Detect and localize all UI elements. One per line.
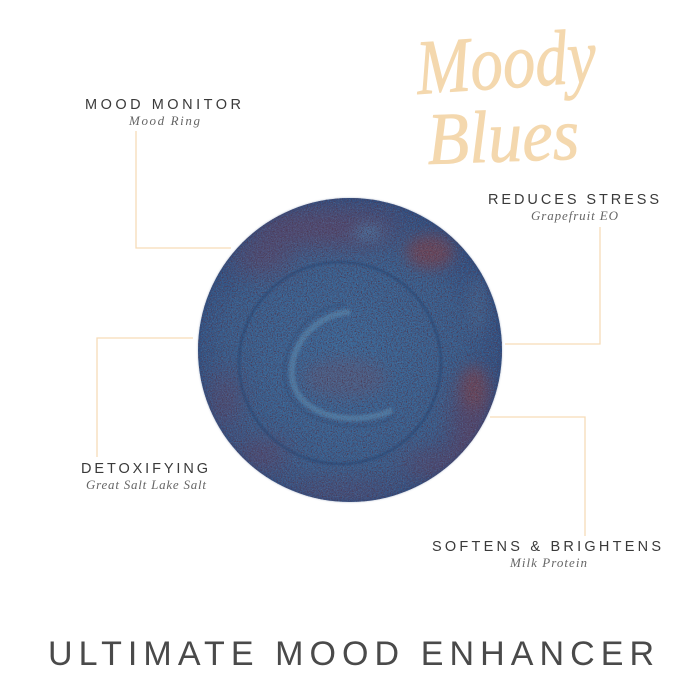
callout: mood monitor: MOOD MONITOR [85,97,241,113]
embossed swirl [292,312,392,418]
callout: reduces stress [488,192,659,344]
title: Moody Blues [412,12,599,181]
callout: mood monitor: Mood Ring [128,113,200,128]
callout: softens and brightens: SOFTENS & BRIGHTENS [432,539,661,555]
callout: detoxifying: DETOXIFYING [81,461,208,477]
callout: reduces stress: REDUCES STRESS [488,192,659,208]
title: Moody Blues: Blues [426,94,581,181]
callout: detoxifying [81,338,208,492]
callout: softens and brightens [432,417,661,570]
callout: mood monitor [85,97,241,248]
callout: detoxifying: Great Salt Lake Salt [86,477,206,492]
callout: reduces stress: Grapefruit EO [531,208,619,223]
footer headline: ULTIMATE MOOD ENHANCER [48,635,654,673]
product: bath bomb [198,198,502,502]
callout: softens and brightens: Milk Protein [509,555,587,570]
title: Moody Blues: Moody [412,12,599,111]
embossed ring [239,262,441,464]
